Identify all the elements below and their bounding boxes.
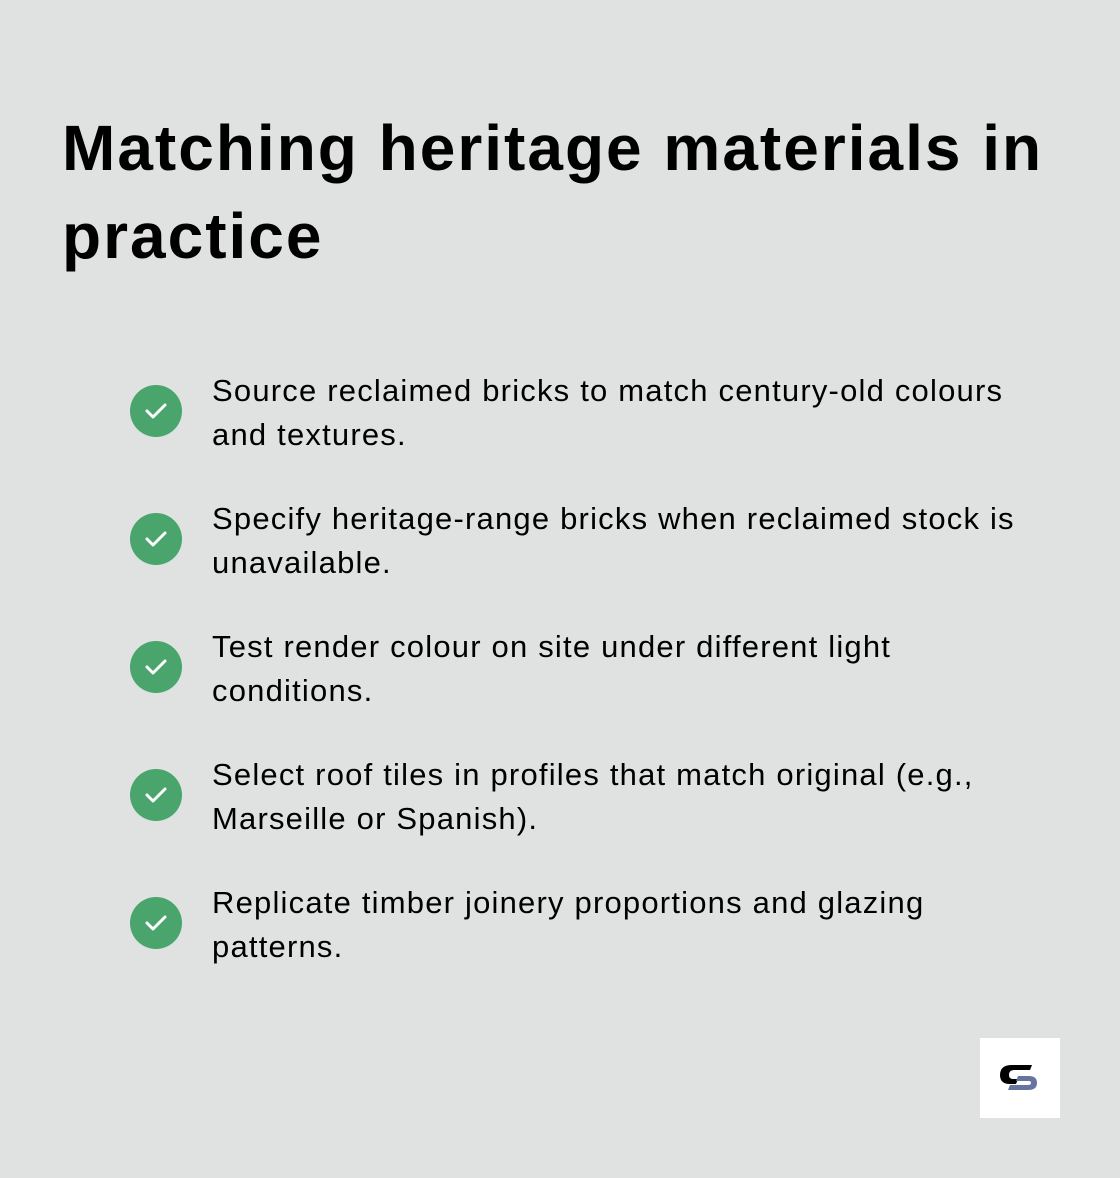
- item 2: [130, 501, 1015, 580]
- text: unavailable.: [212, 545, 392, 580]
- item 4: [130, 757, 974, 836]
- title: Matching heritage materials in: [62, 112, 1043, 184]
- logo: [980, 1038, 1060, 1118]
- icon: check: [130, 641, 182, 693]
- icon: check: [130, 897, 182, 949]
- text: [212, 757, 974, 836]
- text: [212, 501, 1015, 580]
- title: [62, 112, 1043, 272]
- icon: check: [130, 385, 182, 437]
- text: [212, 373, 1003, 452]
- item 1: [130, 373, 1003, 452]
- text: patterns.: [212, 929, 343, 964]
- text: Source reclaimed bricks to match century-old colours: [212, 373, 1003, 408]
- text: [212, 885, 924, 964]
- text: Replicate timber joinery proportions and glazing: [212, 885, 924, 920]
- icon: check: [130, 769, 182, 821]
- text: Select roof tiles in profiles that match original (e.g.,: [212, 757, 974, 792]
- icon: check: [130, 513, 182, 565]
- text: and textures.: [212, 417, 407, 452]
- text: Specify heritage-range bricks when reclaimed stock is: [212, 501, 1015, 536]
- text: [212, 629, 891, 708]
- text: Marseille or Spanish).: [212, 801, 538, 836]
- item 5: [130, 885, 924, 964]
- text: Test render colour on site under different light: [212, 629, 891, 664]
- text: conditions.: [212, 673, 373, 708]
- title: practice: [62, 200, 323, 272]
- item 3: [130, 629, 891, 708]
